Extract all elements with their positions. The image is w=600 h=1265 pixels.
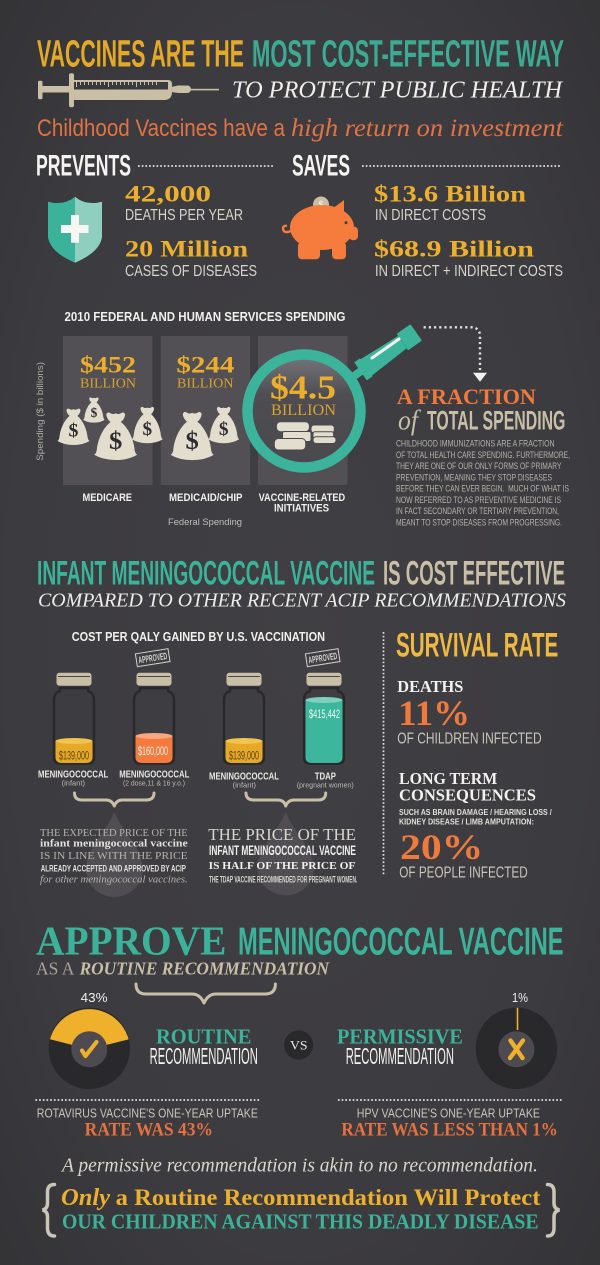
stat: direct costs: $13.6 Billion: [374, 182, 526, 207]
text block: expected price: ALREADY ACCEPTED AND APPROVED BY ACIP: [41, 864, 186, 875]
callout: a routine recommendation will protect: a Routine Recommendation Will Protect: [116, 1185, 541, 1211]
label: long term consequences: LONG TERM: [399, 769, 498, 788]
icon: coins: [274, 422, 336, 450]
icon: syringe: [38, 73, 219, 107]
vial: meningococcal infant second 139000: [224, 673, 264, 764]
stat label: direct costs: IN DIRECT COSTS: [375, 207, 486, 224]
stat: 20 percent: 20%: [400, 827, 483, 867]
value: 244 billion: BILLION: [177, 376, 234, 391]
column: medicare: [63, 336, 152, 485]
text block: half of the price: [208, 825, 357, 885]
text block: consequences list: SUCH AS BRAIN DAMAGE / HEARING LOSS /: [399, 807, 552, 817]
heading: approve: APPROVE: [36, 917, 226, 963]
column: medicaid: [161, 336, 250, 485]
vial: meningococcal infant 139000: $139,000: [59, 750, 89, 762]
paragraph: CHILDHOOD IMMUNIZATIONS ARE A FRACTION: [396, 439, 555, 449]
subheading: as a: AS A: [36, 958, 75, 978]
value: 43 percent: 43%: [81, 991, 108, 1005]
vial label 2: [119, 769, 190, 788]
panel: a fraction of total spending: [396, 384, 570, 527]
icon: money bags medicaid: [171, 407, 239, 460]
stamp: approved 1: APPROVED: [138, 651, 168, 666]
text block: expected price: [40, 827, 188, 885]
stat: indirect costs: $68.9 Billion: [374, 237, 534, 262]
panel: permissive recommendation: [337, 991, 563, 1141]
vial label 3: MENINGOCOCCAL: [209, 770, 279, 782]
stamp: approved 1: [135, 649, 170, 667]
vial: meningococcal infant second 139000: $139,000: [229, 750, 259, 762]
column: vaccine initiatives: [258, 336, 348, 485]
text block: half of the price: IS HALF OF THE PRICE OF: [209, 860, 356, 872]
text block: consequences list: [399, 807, 552, 827]
icon: piggy bank: [283, 196, 358, 259]
section title: infant meningococcal vaccine: [37, 554, 566, 612]
panel: cost per qaly: [38, 629, 357, 897]
icon: vs badge: VS: [290, 1038, 308, 1052]
subheading: COMPARED TO OTHER RECENT ACIP RECOMMENDATIONS: [38, 590, 566, 612]
vial: tdap 415442: [304, 673, 344, 764]
label: routine: ROUTINE: [156, 1024, 251, 1048]
icon: money bags medicaid: $: [219, 419, 229, 440]
stat label: cases: CASES OF DISEASES: [125, 263, 257, 280]
text block: expected price: infant meningococcal vaccine: [40, 838, 188, 850]
label: medicaid: MEDICAID/CHIP: [169, 492, 242, 504]
vial label 4: (pregnant women): [297, 780, 354, 789]
vial label 3: (infant): [233, 780, 256, 789]
vial: meningococcal 2 dose 160000: $160,000: [138, 746, 168, 758]
icon: shield: [48, 197, 102, 263]
label: permissive: PERMISSIVE: [337, 1024, 463, 1048]
value: 452 billion: $452: [80, 353, 136, 378]
vial label 1: [38, 769, 109, 788]
brace left: [74, 793, 154, 806]
vial label 1: MENINGOCOCCAL: [38, 769, 109, 781]
value: 4.5 billion: BILLION: [271, 402, 336, 419]
icon: money bags medicaid: $: [186, 427, 199, 455]
text block: expected price: for other meningococcal vaccines.: [40, 873, 188, 885]
icon: money bags medicare: $: [109, 427, 122, 455]
vial label 1: (infant): [62, 779, 85, 788]
stat label: deaths: DEATHS PER YEAR: [125, 207, 243, 224]
text block: half of the price: INFANT MENINGOCOCCAL VACCINE: [209, 842, 356, 858]
gauge: 1 percent: [476, 1008, 557, 1089]
text: RECOMMENDATION: [150, 1043, 258, 1069]
icon: vs badge: [284, 1030, 313, 1060]
section: main title: [37, 34, 564, 142]
brace right: [246, 793, 326, 806]
heading: prevents: PREVENTS: [36, 150, 131, 183]
caption: rate less than 1: RATE WAS LESS THAN 1%: [341, 1121, 558, 1141]
y axis label: Spending ($ in billions): [35, 362, 46, 461]
chart: federal spending: [35, 310, 423, 527]
heading: saves: SAVES: [292, 150, 350, 183]
label: vaccine related initiatives: VACCINE-RELATED: [259, 492, 345, 504]
bracket right: [548, 1184, 560, 1236]
vial label 4: [297, 770, 354, 789]
icon: money bags medicare: [58, 397, 163, 460]
paragraph: [396, 439, 570, 527]
vial: tdap 415442: $415,442: [309, 709, 340, 721]
label: medicare: MEDICARE: [82, 492, 132, 504]
callout: only a routine recommendation: [42, 1184, 560, 1236]
value: 452 billion: [80, 353, 136, 391]
vial label 2: MENINGOCOCCAL: [119, 769, 190, 781]
icon: money bags medicare: $: [142, 419, 152, 440]
panel: prevents: [36, 150, 273, 280]
callout: our children: OUR CHILDREN AGAINST THIS DEADLY DISEASE: [62, 1209, 539, 1233]
label: vaccine related initiatives: INITIATIVES: [274, 503, 329, 515]
panel: saves: [283, 150, 563, 280]
vial label 2: (2 dose,11 & 16 y.o.): [123, 779, 185, 788]
caption: hpv: HPV VACCINE'S ONE-YEAR UPTAKE: [357, 1107, 540, 1121]
vial label 4: TDAP: [315, 770, 336, 782]
subheading: to protect public health: TO PROTECT PUBLIC HEALTH: [232, 77, 564, 103]
icon: magnifying glass: [248, 323, 423, 468]
bracket left: [42, 1184, 54, 1236]
caption: rate 43: RATE WAS 43%: [85, 1121, 213, 1141]
gauge: 43 percent: [49, 1008, 130, 1089]
callout: only: Only: [61, 1185, 110, 1211]
text block: expected price: THE EXPECTED PRICE OF THE: [40, 827, 188, 839]
stat label: children infected: OF CHILDREN INFECTED: [397, 730, 542, 747]
chart title: 2010 FEDERAL AND HUMAN SERVICES SPENDING: [64, 310, 346, 324]
icon: piggy bank: $: [318, 200, 324, 211]
tagline italic: high return on investment: [291, 115, 564, 142]
text block: consequences list: KIDNEY DISEASE / LIMB AMPUTATION:: [399, 817, 534, 827]
stat: 11 percent: 11%: [398, 693, 470, 733]
arrow: dotted pointer: [424, 327, 487, 382]
vial: meningococcal infant 139000: [54, 673, 94, 764]
chart title: COST PER QALY GAINED BY U.S. VACCINATION: [72, 629, 325, 644]
panel: routine recommendation: [35, 991, 260, 1141]
text block: half of the price: THE TDAP VACCINE RECOMMENDED FOR PREGNANT WOMEN.: [209, 875, 357, 885]
label: vaccine related initiatives: [259, 492, 345, 515]
value: 244 billion: $244: [176, 353, 235, 378]
brace: [136, 984, 275, 1003]
paragraph: PREVENTION, MEANING THEY STOP DISEASES: [396, 472, 552, 482]
drop left: [86, 812, 143, 897]
value: 4.5 billion: $4.5: [270, 370, 336, 407]
icon: money bags medicare: $: [91, 405, 98, 420]
vial label 3: [209, 770, 279, 789]
stat: cases: 20 Million: [125, 237, 248, 262]
vial: meningococcal 2 dose 160000: [134, 673, 174, 764]
stamp: approved 2: [305, 649, 340, 667]
stat: deaths: 42,000: [125, 182, 211, 207]
value: 244 billion: [176, 353, 235, 391]
label: long term consequences: [399, 769, 536, 805]
x axis label: Federal Spending: [168, 517, 242, 527]
heading: of: of: [398, 405, 421, 436]
drop right: [258, 812, 314, 895]
stat label: people infected: OF PEOPLE INFECTED: [399, 865, 528, 882]
stamp: approved 2: APPROVED: [308, 651, 338, 666]
icon: money bags medicare: $: [69, 421, 79, 442]
panel: survival rate: [384, 627, 558, 882]
label: deaths: DEATHS: [397, 677, 463, 696]
heading: a fraction: A FRACTION: [397, 384, 536, 409]
caption: rotavirus: ROTAVIRUS VACCINE'S ONE-YEAR UPTAKE: [37, 1107, 258, 1121]
label: long term consequences: CONSEQUENCES: [399, 786, 536, 805]
text block: half of the price: THE PRICE OF THE: [208, 825, 356, 844]
heading line one yellow: VACCINES ARE THE: [37, 34, 244, 76]
value: 4.5 billion: [270, 370, 336, 419]
subheading: routine recommendation: ROUTINE RECOMMENDATION: [79, 958, 330, 978]
panel: permissive recommendation: RECOMMENDATION: [346, 1043, 454, 1069]
section title: approve: [36, 917, 564, 1003]
text block: expected price: IS IN LINE WITH THE PRICE: [40, 850, 188, 862]
value: 1 percent: 1%: [512, 991, 528, 1005]
tagline sans: Childhood Vaccines have a: [37, 115, 286, 142]
text: permissive note: A permissive recommendation is akin to no recommendation.: [60, 1155, 538, 1177]
value: 452 billion: BILLION: [80, 376, 136, 391]
